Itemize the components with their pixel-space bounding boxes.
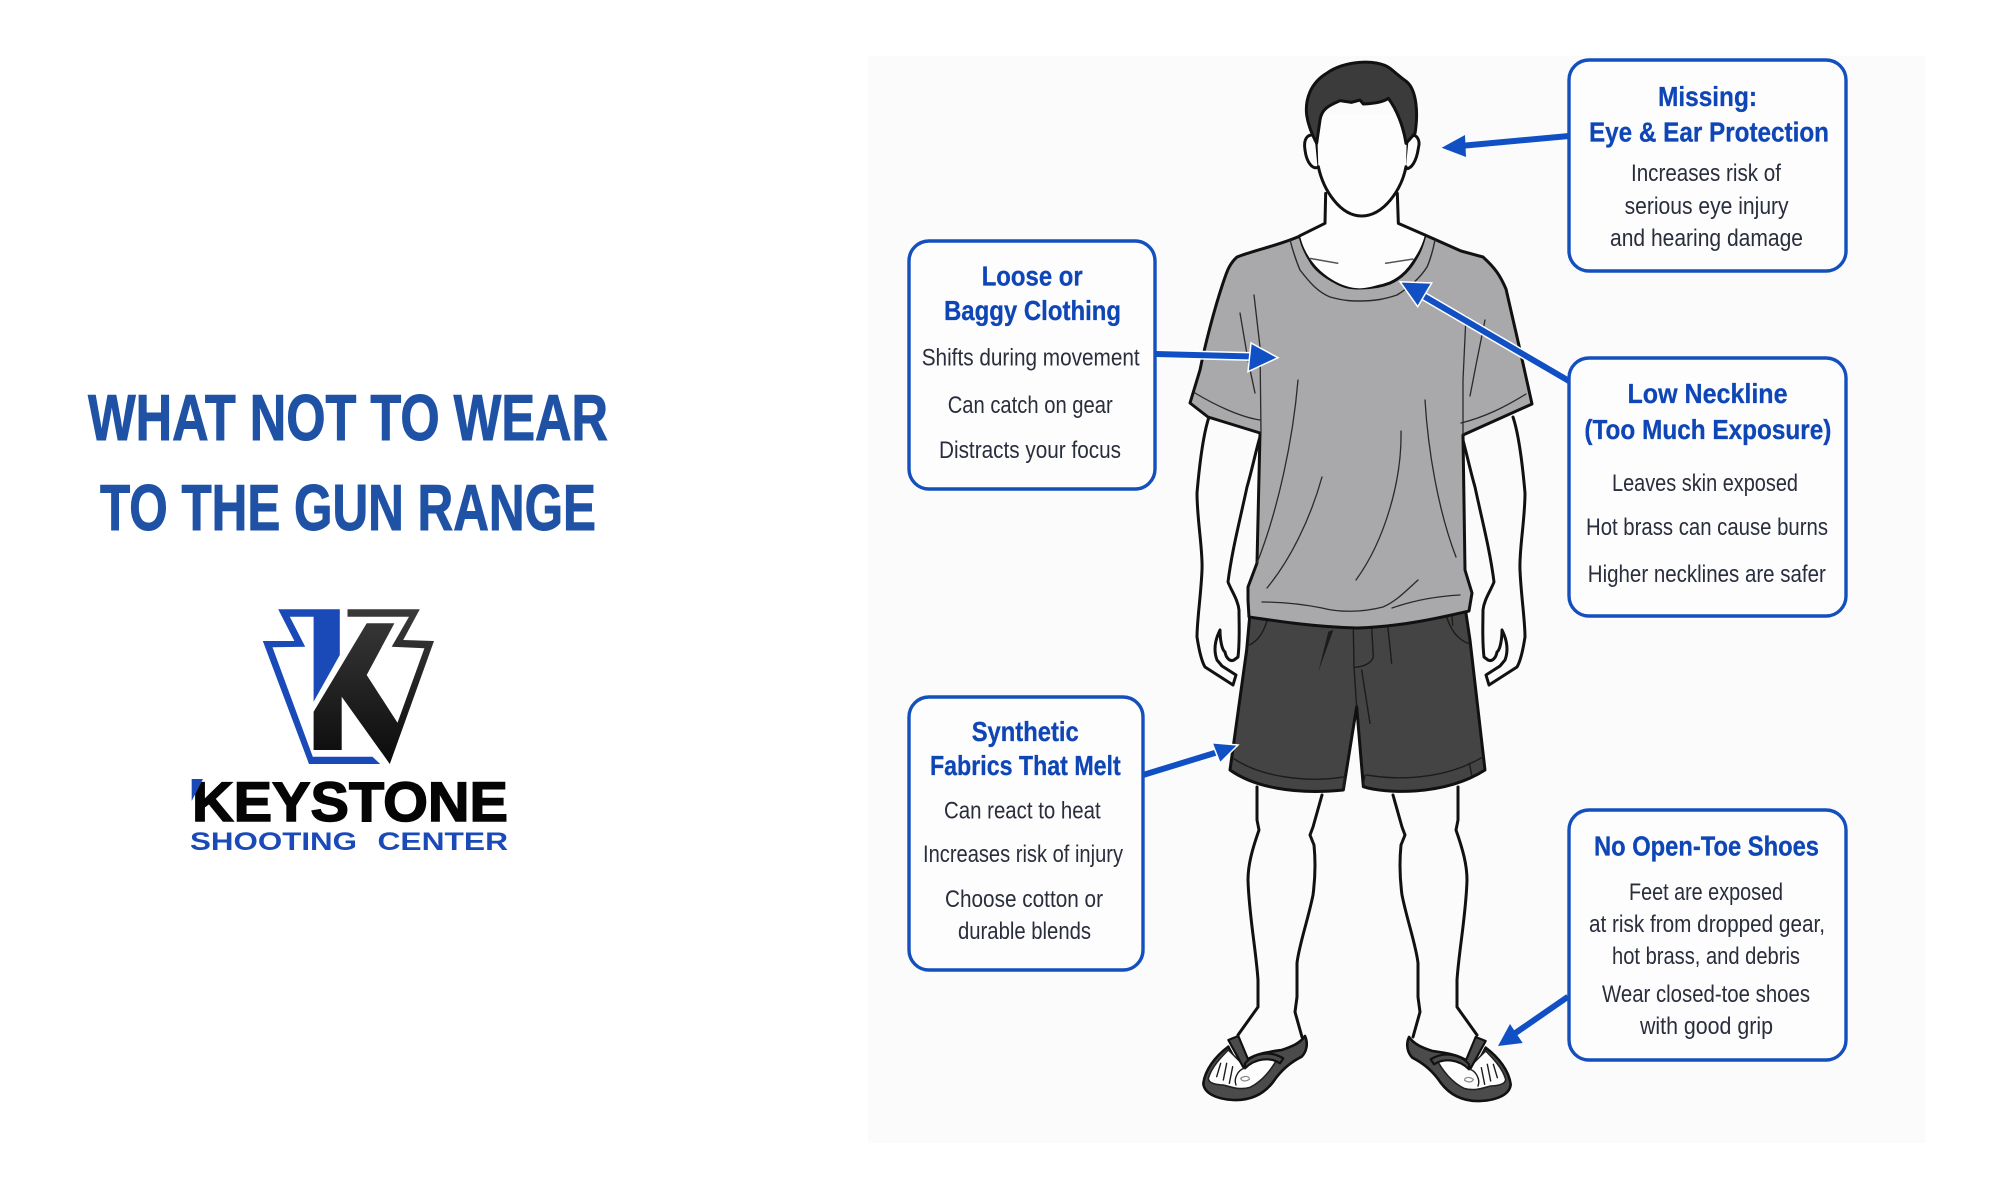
logo subtitle: CENTER (378, 828, 508, 856)
head with blank face and dark hair (1305, 62, 1419, 216)
heading: Synthetic (972, 716, 1079, 747)
panel: No open-toe shoes (1569, 810, 1846, 1060)
heading (1584, 378, 1831, 445)
title: TO THE GUN RANGE (100, 471, 596, 544)
left arm (1197, 417, 1260, 685)
panel: Synthetic fabrics that melt (909, 697, 1143, 970)
icon: black K (314, 609, 434, 764)
heading: Loose or (982, 261, 1083, 292)
title (88, 381, 608, 544)
body text: Increases risk of (1631, 160, 1781, 187)
icon: blue K wedge (192, 779, 203, 801)
body text (1589, 879, 1825, 1040)
body text (1610, 160, 1803, 252)
heading: Baggy Clothing (944, 295, 1121, 326)
body text: Can catch on gear (948, 392, 1113, 419)
arrow: open-toe shoes (1498, 997, 1568, 1046)
heading: Low Neckline (1628, 378, 1788, 409)
heading: No Open-Toe Shoes (1594, 830, 1819, 862)
heading: Fabrics That Melt (930, 750, 1121, 781)
body text: Hot brass can cause burns (1586, 514, 1828, 541)
heading (944, 261, 1121, 326)
shorts (1230, 607, 1485, 791)
panel: Loose or baggy clothing (909, 241, 1155, 489)
t-shirt (1190, 235, 1532, 628)
title: WHAT NOT TO WEAR (88, 381, 608, 454)
heading (930, 716, 1121, 781)
right leg (1393, 787, 1477, 1037)
body text: Higher necklines are safer (1588, 561, 1826, 588)
right arm (1462, 417, 1525, 685)
logo subtitle: SHOOTING (190, 828, 357, 856)
logo wordmark: KEYSTONE (192, 770, 508, 833)
hair (1306, 62, 1417, 143)
body text: Can react to heat (944, 798, 1101, 825)
panel: illustration background (868, 56, 1925, 1143)
body text: with good grip (1639, 1013, 1773, 1040)
arrow: eye and ear protection (1442, 135, 1569, 157)
body text (922, 345, 1140, 464)
icon: blue keystone outline (263, 609, 380, 764)
heading: (Too Much Exposure) (1584, 414, 1831, 445)
left leg (1238, 787, 1322, 1037)
collar rib (1290, 240, 1435, 301)
body text: hot brass, and debris (1612, 943, 1800, 970)
body text: Choose cotton or (945, 886, 1103, 913)
body text: Wear closed-toe shoes (1602, 981, 1810, 1008)
right sandal (1407, 1037, 1511, 1101)
figure: man in t-shirt, shorts and sandals (1190, 62, 1532, 1101)
left sandal (1203, 1036, 1307, 1100)
logo subtitle (190, 828, 508, 856)
body text: Distracts your focus (939, 437, 1121, 464)
ears (1305, 135, 1319, 168)
body text: durable blends (958, 918, 1091, 945)
body text: and hearing damage (1610, 225, 1803, 252)
body text (1586, 470, 1828, 588)
body text: Shifts during movement (922, 345, 1140, 372)
panel: Low neckline (1569, 358, 1846, 616)
heading: Missing: (1658, 81, 1757, 112)
arrow: loose clothing (1156, 343, 1278, 372)
panel: Missing eye and ear protection (1569, 60, 1846, 271)
body text: serious eye injury (1625, 193, 1789, 220)
heading: Eye & Ear Protection (1589, 116, 1829, 148)
body text: Leaves skin exposed (1612, 470, 1798, 497)
face (1317, 113, 1407, 216)
body text: Increases risk of injury (923, 841, 1123, 868)
logo: Keystone Shooting Center (190, 609, 508, 856)
body text: at risk from dropped gear, (1589, 911, 1825, 938)
neck (1300, 190, 1425, 288)
heading (1589, 81, 1829, 148)
sleeve hems and folds (1195, 295, 1526, 611)
arrow: synthetic fabrics (1143, 743, 1238, 775)
body text: Feet are exposed (1629, 879, 1783, 906)
body text (923, 798, 1123, 945)
arrow: low neckline (1400, 282, 1569, 381)
